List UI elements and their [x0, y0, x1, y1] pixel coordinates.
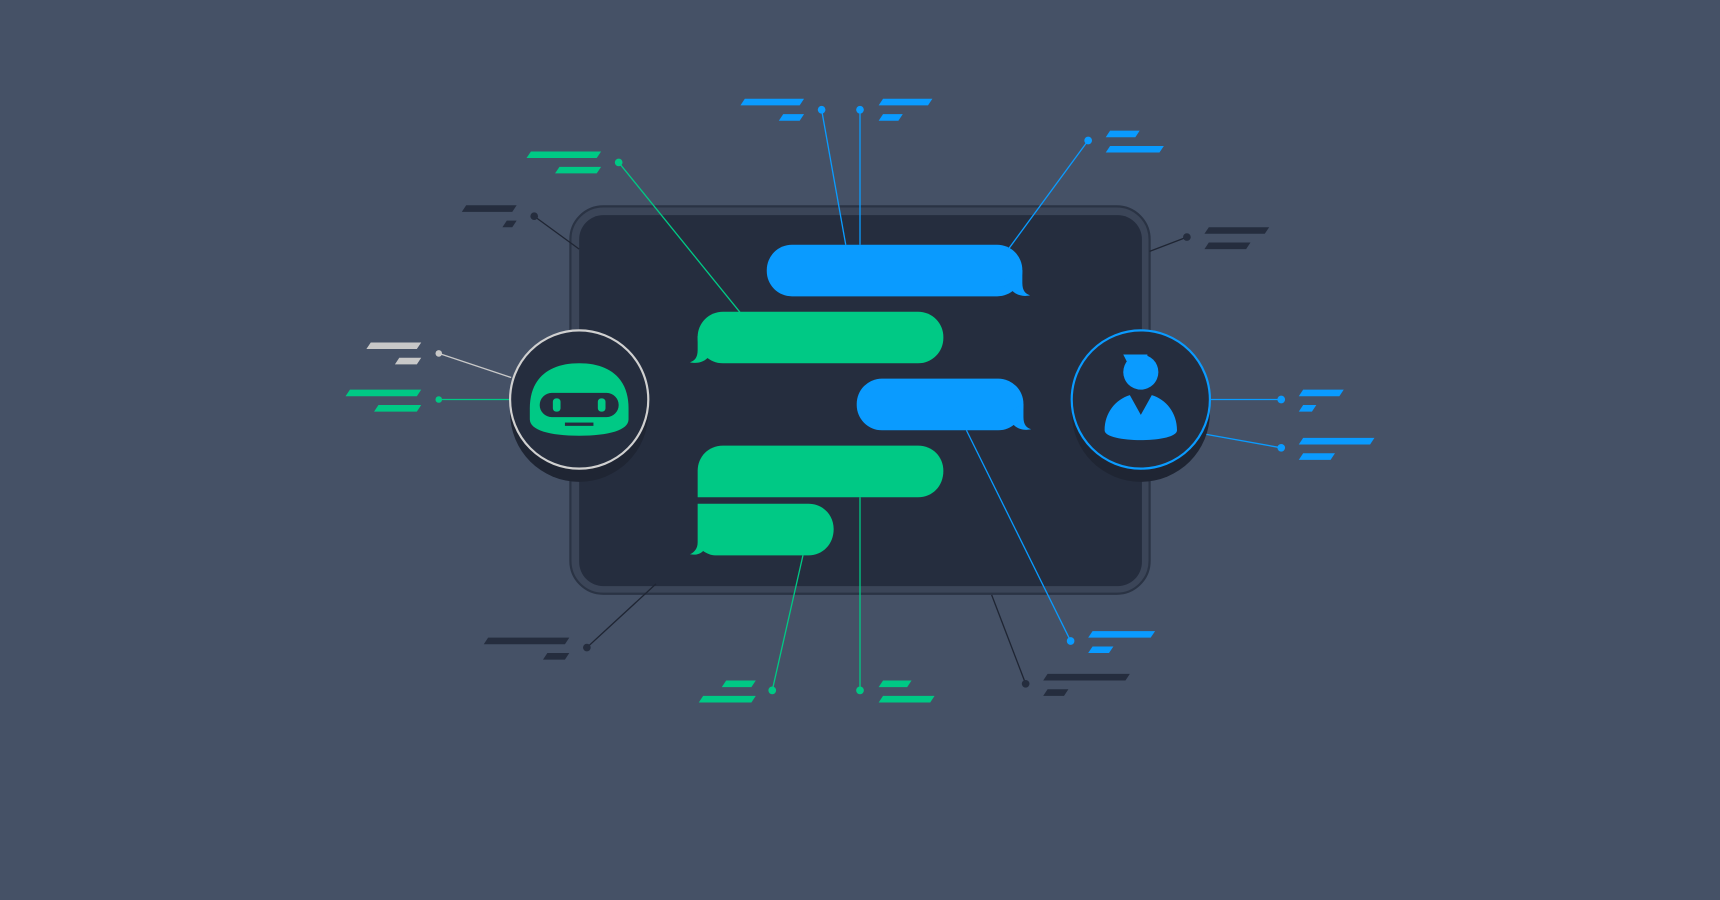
connector lines	[439, 110, 1281, 690]
icon: robot avatar	[510, 330, 648, 482]
dots	[435, 106, 1285, 694]
chat bubble: green 3	[690, 504, 834, 555]
chat bubble: green 2	[698, 446, 943, 497]
tablet device	[570, 206, 1150, 594]
dash labels	[346, 99, 1374, 702]
chat bubble: green 1	[690, 312, 943, 363]
icon: person avatar	[1072, 330, 1210, 482]
chat bubble: blue 1	[767, 245, 1030, 296]
chat bubble: blue 2	[857, 379, 1031, 430]
